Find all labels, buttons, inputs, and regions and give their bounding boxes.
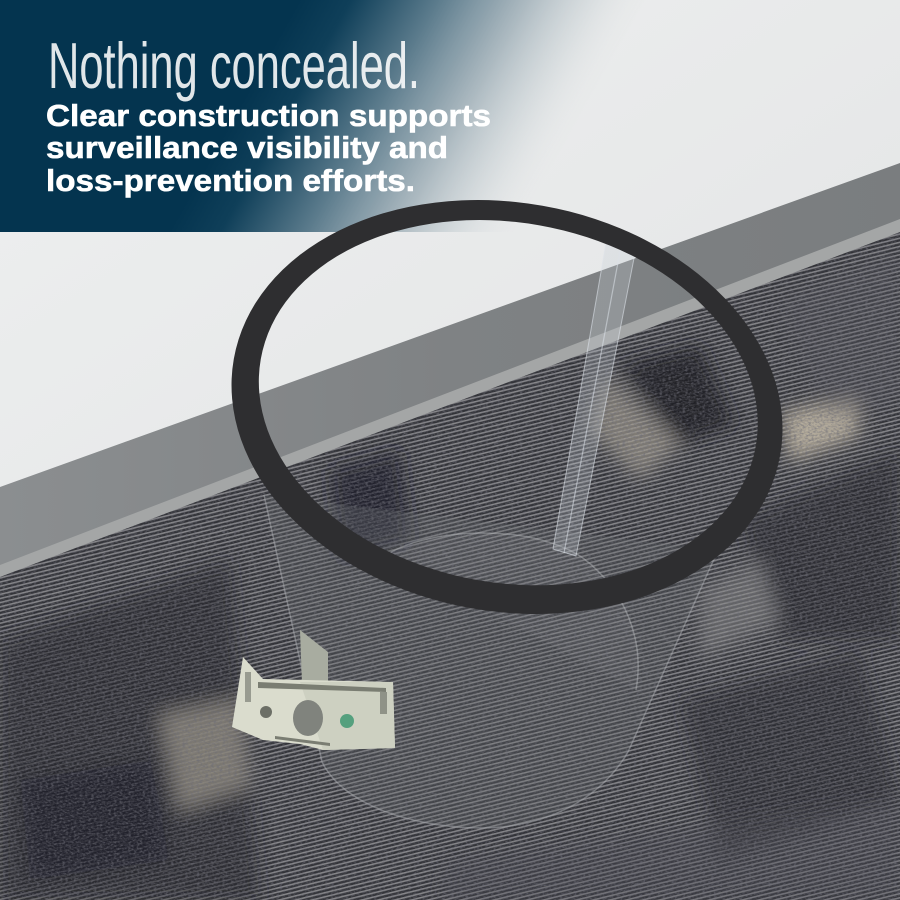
bill folded flap: [300, 630, 328, 684]
title: Nothing concealed.: [48, 29, 420, 102]
bill top band: [258, 682, 386, 692]
carpet shading patches: [0, 250, 900, 900]
subtitle line 2: surveillance visibility and: [46, 130, 448, 165]
bill body: [232, 657, 395, 750]
bill black seal: [260, 706, 272, 718]
bill right edge numeral: [380, 692, 387, 714]
black rim: [198, 158, 816, 656]
subtitle: [46, 98, 491, 198]
banner background: [0, 0, 660, 232]
wall: [0, 0, 900, 600]
basket floor: [385, 533, 638, 690]
carpet: [0, 230, 900, 900]
basket body: [264, 495, 718, 828]
subtitle line 3: loss-prevention efforts.: [46, 163, 415, 198]
bill green seal: [340, 714, 354, 728]
seam strip: [553, 243, 636, 556]
bill left edge numeral: [245, 672, 251, 702]
baseboard: [0, 163, 900, 577]
carpet noise: [0, 230, 900, 900]
bill bottom band: [275, 736, 330, 746]
clear wastebasket: [198, 158, 816, 828]
basket side edges: [264, 495, 718, 828]
subtitle line 1: Clear construction supports: [46, 98, 491, 133]
bill portrait: [293, 700, 323, 736]
dollar bill: [232, 630, 395, 750]
